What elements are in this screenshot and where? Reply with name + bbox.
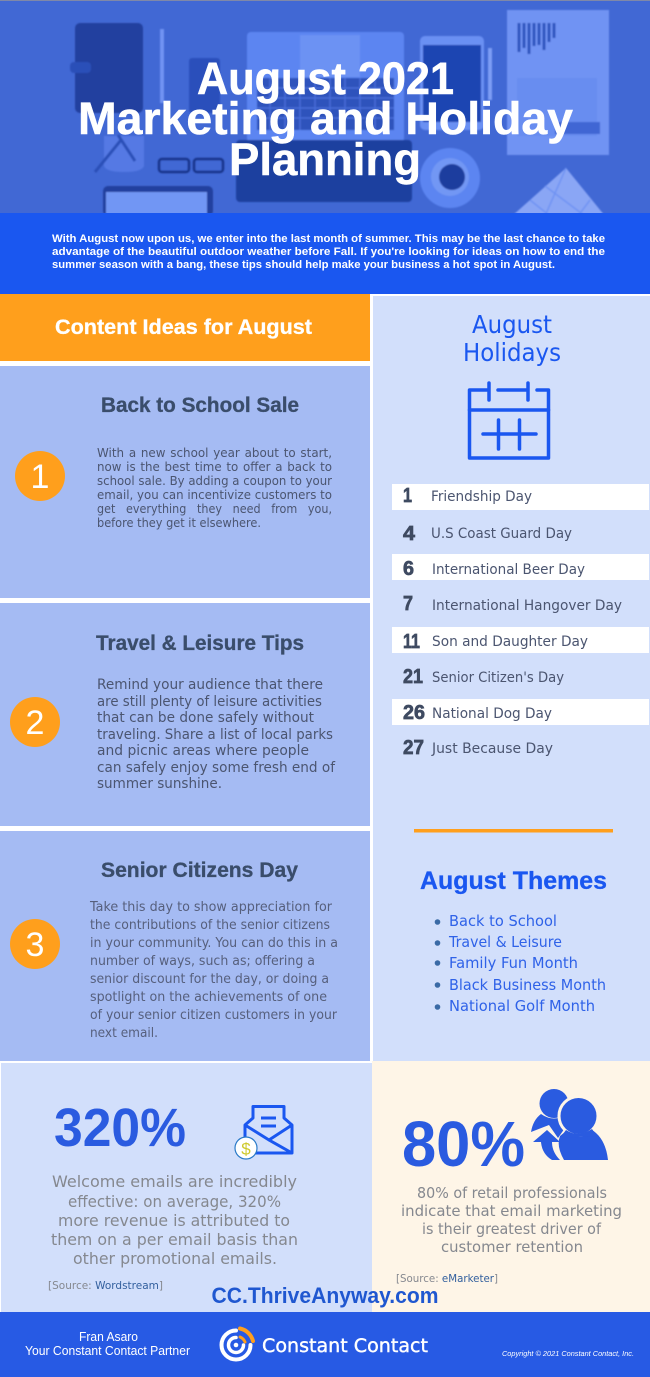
heading: travel and leisure tips: Travel & Leisure Tips [96,632,304,655]
copyright: Copyright © 2021 Constant Contact, Inc. [502,1349,634,1358]
body text [97,677,336,792]
holiday names: U.S Coast Guard Day [431,526,572,542]
body text: that can be done safely without [97,710,314,726]
header photo background [0,0,650,216]
body text: With a new school year about to start, [97,445,332,460]
number badge 2 [10,697,60,747]
stat: 80%: 80% [402,1108,525,1180]
body text: before they get it elsewhere. [97,515,261,530]
intro text: summer season with a bang, these tips should help make your business a hot spot in August. [52,259,555,271]
panel: content ideas heading [0,294,370,361]
body text: and picnic areas where people [97,743,309,759]
holiday names [431,489,622,757]
holiday dates: 26 [403,702,425,724]
title: Marketing and Holiday [78,93,573,144]
holiday dates: 7 [403,593,413,615]
intro band [0,213,650,294]
icon: envelope with coin [235,1106,292,1159]
body text: Remind your audience that there [97,677,323,693]
body text: traveling. Share a list of local parks [97,727,333,743]
body text [97,445,333,530]
title: August 2021 [197,53,454,104]
number badge 1 [15,451,65,501]
stat description: Welcome emails are incredibly [52,1172,297,1191]
heading: back to school sale: Back to School Sale [101,394,299,417]
themes list: Travel & Leisure [448,933,562,951]
holiday dates [403,485,425,759]
source: wordstream: [Source: Wordstream] [48,1279,163,1292]
stat description: customer retention [441,1238,583,1256]
stat: 320%: 320% [54,1098,186,1158]
body text: spotlight on the achievements of one [90,989,327,1005]
heading: august holidays: Holidays [463,338,561,367]
constant contact logo [222,1328,428,1360]
holiday names: Just Because Day [431,741,553,757]
themes list: National Golf Month [449,997,595,1015]
number badge 3: 3 [26,926,44,964]
intro text: advantage of the beautiful outdoor weather before Fall. If you're looking for ideas on how to end the [52,246,605,258]
heading: august holidays: August [472,310,552,339]
body text: number of ways, such as; offering a [90,953,315,969]
holiday dates: 27 [403,737,424,759]
body text: of your senior citizen customers in your [90,1007,337,1023]
panel: back to school sale [0,366,370,598]
icon: calendar [470,383,548,458]
holiday dates: 6 [403,558,414,580]
body text: now is the best time to offer a back to [97,459,332,474]
body text [89,899,338,1041]
partner name: Your Constant Contact Partner [25,1344,190,1358]
body text: are still plenty of leisure activities [97,694,322,710]
stat description: is their greatest driver of [422,1220,601,1238]
number badge 3 [10,919,60,969]
themes list: Back to School [449,912,557,930]
holiday dates: 11 [403,631,420,653]
partner name: Fran Asaro [79,1330,138,1344]
stat description: effective: on average, 320% [68,1192,281,1211]
intro text [52,233,605,271]
holiday dates: 21 [403,666,423,688]
panel: 80 percent stat [372,1061,650,1312]
heading: senior citizens day: Senior Citizens Day [101,859,298,882]
body text: Take this day to show appreciation for [89,899,332,915]
panel: 320 percent stat [1,1063,372,1312]
holiday names: International Hangover Day [432,598,622,614]
body text: email, you can incentivize customers to [97,487,332,502]
heading: august themes: August Themes [420,867,607,895]
panel: senior citizens day [0,831,370,1061]
constant contact logo: Constant Contact [262,1335,428,1357]
stat description: 80% of retail professionals [417,1184,607,1202]
holiday names: National Dog Day [432,706,552,722]
holiday list [392,484,649,759]
panel: content ideas heading: Content Ideas for August [55,315,312,339]
holiday names: International Beer Day [432,562,585,578]
panel: travel and leisure tips [0,603,370,826]
stat description [401,1184,622,1256]
body text: get everything they need from you, [97,501,332,516]
stat description: indicate that email marketing [401,1202,622,1220]
partner name [25,1330,190,1358]
icon: people with arrow [531,1089,608,1160]
title: Planning [229,134,421,185]
stat description: them on a per email basis than [51,1230,298,1249]
body text: school sale. By adding a coupon to your [97,473,333,488]
holiday names: Friendship Day [431,489,532,505]
holiday dates: 1 [403,485,412,507]
stat description [51,1172,298,1268]
number badge 2: 2 [26,704,44,742]
number badge 1: 1 [31,458,49,496]
themes list: Family Fun Month [449,954,578,972]
title [78,53,573,185]
stat description: other promotional emails. [73,1249,277,1268]
body text: next email. [90,1025,158,1041]
themes list [435,912,606,1015]
source: emarketer: [Source: eMarketer] [396,1272,498,1285]
heading: august holidays [463,310,561,367]
body text: can safely enjoy some fresh end of [97,760,336,776]
themes list: Black Business Month [449,976,606,994]
footer [0,1312,650,1377]
body text: the contributions of the senior citizens [90,917,330,933]
icon: envelope with coin: $ [241,1140,251,1158]
body text: summer sunshine. [97,776,222,792]
holiday names: Son and Daughter Day [432,634,588,650]
stat description: more revenue is attributed to [58,1211,290,1230]
website link: CC.ThriveAnyway.com [212,1283,438,1308]
holiday names: Senior Citizen's Day [432,670,564,686]
body text: in your community. You can do this in a [90,935,338,951]
panel: august holidays and themes [373,296,650,1061]
intro text: With August now upon us, we enter into the last month of summer. This may be the last chance to take [52,233,605,245]
holiday dates: 4 [403,523,416,545]
body text: senior discount for the day, or doing a [90,971,329,987]
